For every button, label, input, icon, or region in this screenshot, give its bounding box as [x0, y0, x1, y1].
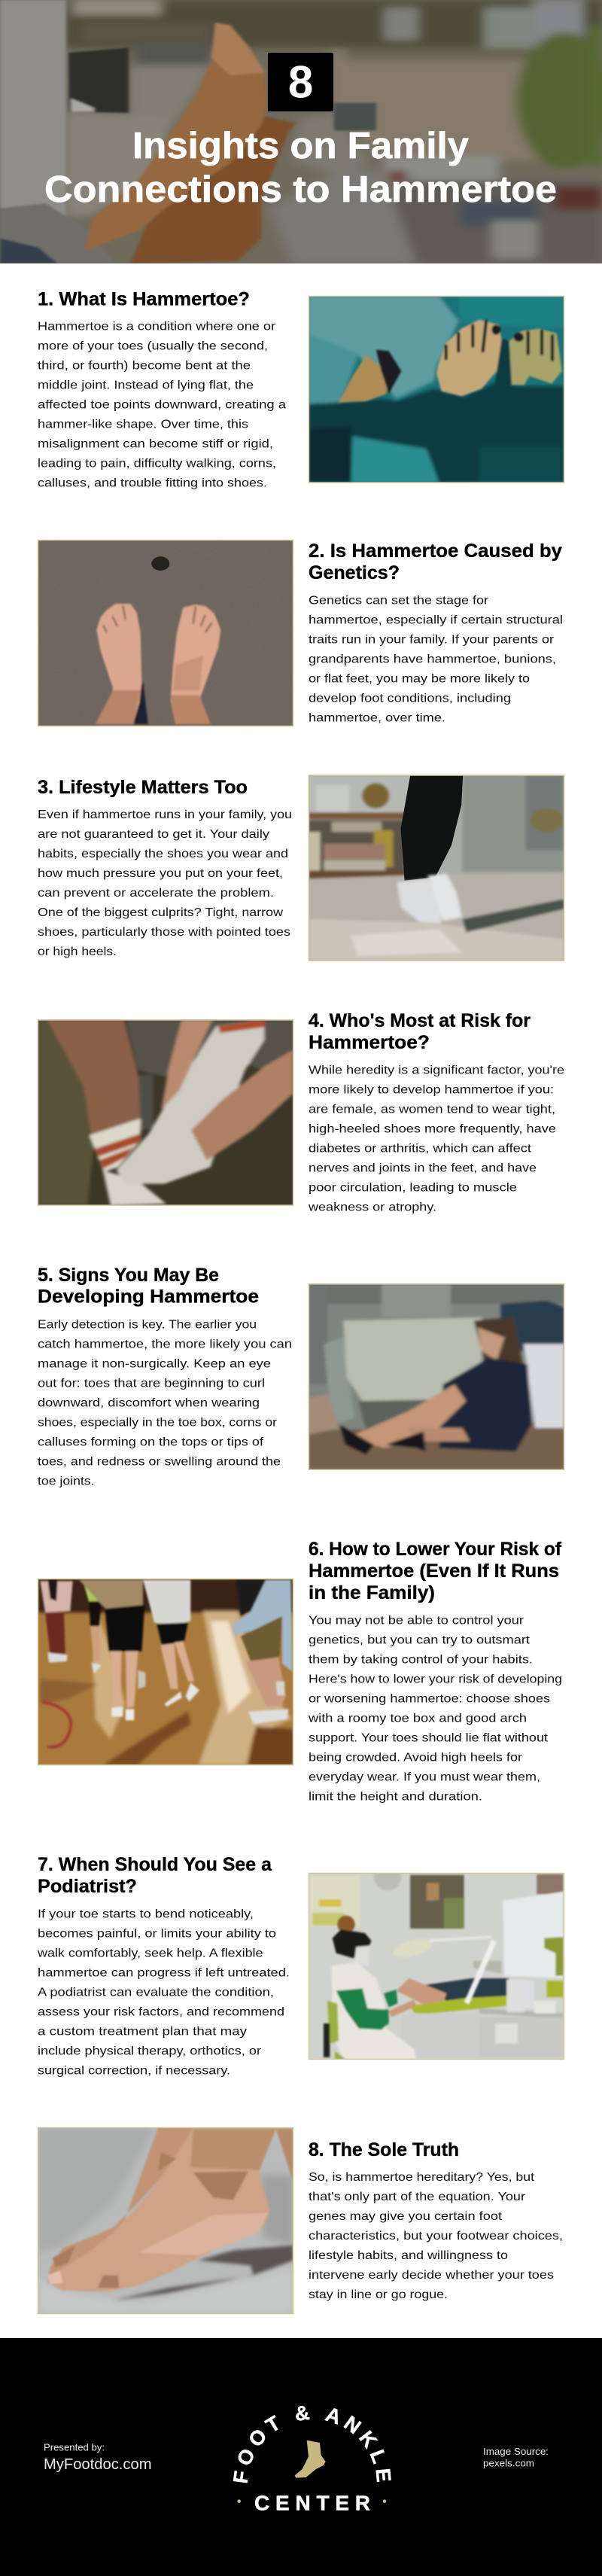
text block 5: catch hammertoe, the more likely you can — [38, 1338, 292, 1351]
presented by: MyFootdoc.com — [44, 2456, 152, 2473]
badge number 8: 8 — [288, 57, 313, 107]
footer — [0, 2338, 602, 2576]
text block 1: misalignment can become stiff or rigid, — [38, 437, 273, 450]
heading 6: in the Family) — [309, 1582, 435, 1603]
image: close-up of a foot — [38, 2127, 293, 2314]
text block 1: third, or fourth) become bent at the — [38, 359, 251, 372]
text block 6: genetics, but you can try to outsmart — [309, 1634, 531, 1647]
presented by — [44, 2442, 152, 2473]
text block 2: hammertoe, especially if certain structural — [309, 614, 563, 627]
text block 3: shoes, particularly those with pointed toes — [38, 926, 290, 939]
text block 1: Hammertoe is a condition where one or — [38, 320, 276, 333]
logo: Foot &amp; Ankle Center: FOOT & ANKLE — [233, 2406, 391, 2483]
heading 8: 8. The Sole Truth — [309, 2139, 459, 2160]
image: hands putting on a white sock — [38, 1019, 293, 1206]
text block 1: calluses, and trouble fitting into shoes. — [38, 477, 267, 489]
heading 1: 1. What Is Hammertoe? — [38, 288, 250, 309]
heading 7: Podiatrist? — [38, 1876, 137, 1897]
text block 3: can prevent or accelerate the problem. — [38, 887, 274, 900]
text block 7 — [37, 1908, 290, 2078]
text block 2: hammertoe, over time. — [309, 712, 445, 725]
text block 2: grandparents have hammertoe, bunions, — [309, 653, 556, 666]
heading 2 — [309, 540, 562, 583]
heading 2: Genetics? — [309, 562, 400, 583]
text block 6: support. Your toes should lie flat without — [309, 1731, 549, 1745]
text block 6: everyday wear. If you must wear them, — [309, 1771, 540, 1784]
logo: Foot &amp; Ankle Center — [233, 2406, 391, 2514]
text block 7: a custom treatment plan that may — [38, 2026, 247, 2039]
image: bare feet on sand — [38, 540, 293, 726]
text block 7: hammertoe can progress if left untreated. — [38, 1967, 290, 1980]
presented by: Presented by: — [44, 2442, 105, 2453]
text block 6: them by taking control of your habits. — [309, 1653, 533, 1667]
text block 3: how much pressure you put on your feet, — [38, 867, 283, 880]
text block 5: toes, and redness or swelling around the — [38, 1456, 281, 1469]
text block 4: more likely to develop hammertoe if you: — [309, 1083, 554, 1096]
text block 7: walk comfortably, seek help. A flexible — [37, 1947, 263, 1960]
text block 8: genes may give you certain foot — [309, 2210, 503, 2223]
text block 8: So, is hammertoe hereditary? Yes, but — [309, 2171, 535, 2184]
text block 5: calluses forming on the tops or tips of — [38, 1436, 264, 1449]
text block 3: habits, especially the shoes you wear and — [38, 848, 288, 860]
text block 2 — [309, 595, 563, 725]
text block 5: shoes, especially in the toe box, corns or — [38, 1417, 278, 1430]
panel: 2. Is Hammertoe Caused by Genetics — [38, 540, 563, 726]
text block 4: poor circulation, leading to muscle — [309, 1181, 517, 1194]
text block 6: You may not be able to control your — [309, 1614, 524, 1628]
text block 6: being crowded. Avoid high heels for — [309, 1751, 523, 1765]
text block 7: include physical therapy, orthotics, or — [38, 2045, 262, 2058]
text block 2: Genetics can set the stage for — [309, 595, 489, 607]
text block 5: downward, discomfort when wearing — [38, 1397, 260, 1410]
panel: 6. How to Lower Your Risk of Hammertoe — [38, 1539, 562, 1804]
text block 5: Early detection is key. The earlier you — [38, 1319, 257, 1332]
icon: foot — [295, 2441, 326, 2478]
panel: 7. When Should You See a Podiatrist — [37, 1854, 564, 2078]
panel: 5. Signs You May Be Developing Hammertoe — [38, 1265, 564, 1488]
text block 1: affected toe points downward, creating a — [38, 398, 286, 411]
heading 4 — [309, 1010, 531, 1053]
text block 1: middle joint. Instead of lying flat, the — [38, 379, 254, 391]
heading 7 — [38, 1854, 272, 1897]
text block 4: high-heeled shoes more frequently, have — [309, 1122, 556, 1135]
text block 3 — [38, 808, 292, 958]
text block 6: with a roomy toe box and good arch — [308, 1712, 527, 1725]
image: feet in teal water — [309, 296, 564, 483]
text block 1: hammer-like shape. Over time, this — [38, 418, 248, 431]
text block 3: or high heels. — [38, 945, 117, 958]
heading 5: 5. Signs You May Be — [38, 1265, 219, 1286]
text block 5: out for: toes that are beginning to curl — [38, 1378, 265, 1390]
text block 3: One of the biggest culprits? Tight, narrow — [38, 906, 283, 919]
heading 5: Developing Hammertoe — [38, 1286, 259, 1308]
title: Insights on Family — [132, 126, 469, 166]
text block 5 — [38, 1319, 292, 1488]
title: Connections to Hammertoe — [44, 169, 557, 210]
text block 4: While heredity is a significant factor, you're — [309, 1064, 564, 1076]
text block 3: are not guaranteed to get it. Your daily — [38, 828, 269, 841]
panel: 4. Who's Most at Risk for Hammertoe — [38, 1010, 564, 1213]
text block 1 — [38, 320, 286, 489]
heading 6: 6. How to Lower Your Risk of — [309, 1539, 562, 1560]
text block 4: weakness or atrophy. — [308, 1201, 436, 1213]
title — [44, 126, 557, 210]
text block 5: manage it non-surgically. Keep an eye — [38, 1358, 271, 1371]
text block 2: traits run in your family. If your parents or — [309, 634, 555, 647]
text block 4: are female, as women tend to wear tight, — [309, 1103, 555, 1116]
text block 2: or flat feet, you may be more likely to — [309, 673, 530, 686]
text block 8: stay in line or go rogue. — [309, 2288, 448, 2301]
panel: 3. Lifestyle Matters Too — [38, 775, 564, 961]
image source: pexels.com — [483, 2457, 534, 2469]
heading 6: Hammertoe (Even If It Runs — [309, 1561, 559, 1582]
heading 4: 4. Who's Most at Risk for — [309, 1010, 531, 1031]
text block 8 — [309, 2171, 563, 2301]
text block 5: toe joints. — [38, 1475, 94, 1488]
image: woman fastening high heels — [309, 1283, 564, 1470]
text block 4: nerves and joints in the feet, and have — [309, 1162, 537, 1174]
text block 6: Here's how to lower your risk of developing — [309, 1673, 562, 1686]
heading 2: 2. Is Hammertoe Caused by — [309, 540, 562, 562]
text block 1: more of your toes (usually the second, — [38, 340, 268, 352]
heading 6 — [309, 1539, 562, 1603]
text block 6: limit the height and duration. — [309, 1790, 482, 1804]
text block 6: or worsening hammertoe: choose shoes — [309, 1692, 550, 1706]
header background photo: crossed feet on a balcony — [0, 0, 602, 263]
image source: Image Source: — [483, 2446, 549, 2457]
text block 1: leading to pain, difficulty walking, corns, — [38, 457, 276, 470]
text block 4: diabetes or arthritis, which can affect — [309, 1142, 532, 1155]
panel: 8. The Sole Truth — [38, 2127, 563, 2314]
text block 8: lifestyle habits, and willingness to — [309, 2249, 508, 2262]
heading 5 — [38, 1265, 259, 1308]
image: white sneakers in a room — [309, 775, 564, 961]
text block 8: intervene early decide whether your toes — [309, 2269, 554, 2282]
text block 7: A podiatrist can evaluate the condition, — [38, 1987, 274, 1999]
text block 3: Even if hammertoe runs in your family, you — [38, 808, 292, 821]
text block 2: develop foot conditions, including — [309, 693, 511, 705]
text block 7: If your toe starts to bend noticeably, — [38, 1908, 254, 1921]
image source — [483, 2446, 549, 2469]
image: group on a gym floor — [38, 1579, 293, 1765]
heading 7: 7. When Should You See a — [38, 1854, 272, 1875]
heading 4: Hammertoe? — [309, 1032, 430, 1053]
logo: Foot &amp; Ankle Center: CENTER — [254, 2491, 370, 2514]
text block 6 — [308, 1614, 562, 1804]
heading 3: 3. Lifestyle Matters Too — [38, 777, 248, 798]
text block 7: assess your risk factors, and recommend — [38, 2006, 284, 2019]
header banner — [0, 0, 602, 263]
text block 7: surgical correction, if necessary. — [38, 2065, 230, 2078]
panel: 1. What Is Hammertoe — [38, 288, 564, 489]
text block 4 — [308, 1064, 564, 1213]
image: podiatrist treating a patient — [309, 1863, 564, 2060]
text block 7: becomes painful, or limits your ability to — [38, 1928, 276, 1941]
badge number 8 — [268, 53, 333, 111]
text block 8: that's only part of the equation. Your — [309, 2191, 526, 2203]
text block 8: characteristics, but your footwear choices, — [309, 2230, 563, 2243]
